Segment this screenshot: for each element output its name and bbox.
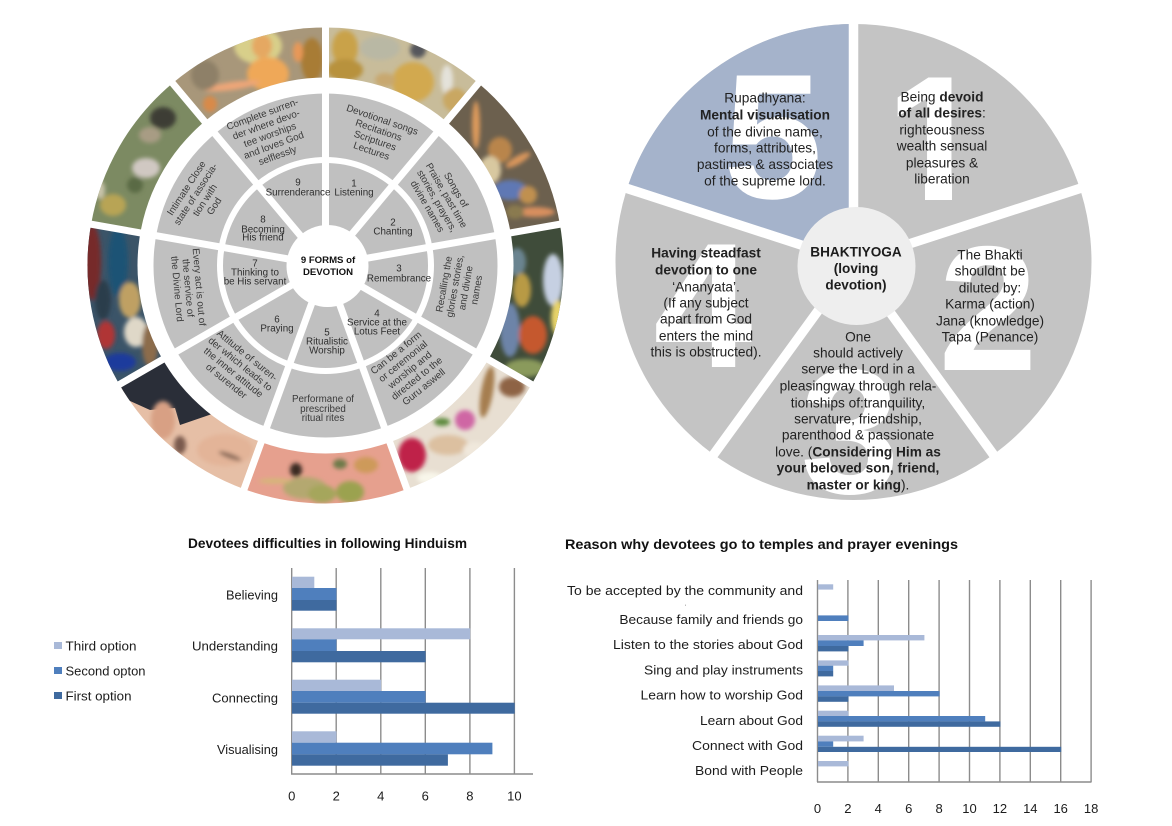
outer ring descriptions: Praise, past time	[423, 161, 469, 231]
inner ring labels: forms 1 to 9: Listening	[334, 188, 374, 198]
image panel 8: procession in green landscape	[92, 86, 202, 230]
centre label	[301, 255, 356, 278]
sector 3 text: love. (Considering Him as	[775, 444, 941, 460]
outer ring descriptions: Performane of	[292, 394, 354, 405]
sector 5 text: forms, attributes,	[714, 140, 816, 156]
bar chart: reasons for attending: 16	[1053, 801, 1068, 816]
sector 4 text: ‘Ananyata’.	[672, 280, 740, 294]
bar chart: reasons for attending: Bond with People	[695, 763, 803, 778]
chart title: reasons: Reason why devotees go to temples and prayer evenings	[565, 537, 958, 552]
chart title: difficulties: Devotees difficulties in following Hinduism	[188, 536, 467, 551]
image panel 4: flowers and offering hand	[393, 362, 530, 488]
bar chart: devotees difficulties: 2	[333, 789, 340, 804]
outer ring descriptions: der which leads to	[206, 335, 274, 394]
outer ring descriptions: the inner attitude	[201, 346, 265, 401]
outer ring descriptions: names	[469, 275, 485, 305]
bar chart: devotees difficulties: Visualising	[217, 742, 278, 757]
outer ring descriptions: the service of	[179, 259, 196, 318]
outer ring descriptions: and loves God	[242, 130, 306, 162]
outer ring descriptions: stories, prayers,	[414, 168, 459, 234]
large sector numerals: 2	[938, 209, 1038, 408]
image panel 1: two golden figures	[329, 28, 476, 120]
outer ring descriptions: worship and	[386, 349, 434, 392]
bar chart: reasons for attending: 10	[962, 801, 977, 816]
bar chart: reasons for attending: 2	[844, 801, 852, 816]
sector 2 text: Jana (knowledge)	[936, 314, 1044, 328]
sector 5 text: of the supreme lord.	[704, 174, 826, 188]
centre circle: Bhaktiyoga: BHAKTIYOGA	[810, 244, 902, 260]
bar chart: reasons for attending: Because family and friends go	[619, 612, 803, 627]
sector 4 text: this is obstructed).	[650, 344, 762, 360]
bar chart: reasons for attending: 12	[993, 801, 1007, 816]
sector 3 text: master or king).	[807, 478, 909, 492]
bar chart: devotees difficulties: Understanding	[192, 638, 278, 654]
bar chart: devotees difficulties: 6	[422, 789, 429, 804]
sector 5 text: Rupadhyana:	[724, 90, 806, 106]
large sector numerals: 1	[886, 39, 984, 238]
image panel 3: Krishna with gopis	[490, 228, 564, 382]
image panel 6: praying hands and face	[121, 362, 258, 488]
bar chart: devotees difficulties: 4	[377, 789, 384, 804]
sector 2 text: shouldnt be	[955, 264, 1025, 278]
large sector numerals: 5	[724, 37, 822, 236]
inner ring labels: forms 1 to 9: Chanting	[373, 226, 413, 238]
outer ring descriptions: prescribed	[300, 404, 346, 415]
sector 1 text: wealth sensual	[896, 138, 987, 154]
bar chart: devotees difficulties: 0	[288, 789, 295, 804]
outer ring descriptions: divine names	[408, 179, 446, 235]
sector 3 text: your beloved son, friend,	[777, 460, 939, 476]
inner ring labels: forms 1 to 9: Praying	[260, 324, 294, 334]
bar chart: reasons for attending: Learn how to worship God	[640, 688, 803, 702]
right wheel: Bhaktiyoga	[616, 17, 1092, 531]
outer ring descriptions: Scriptures	[352, 129, 398, 154]
bar chart: devotees difficulties: Connecting	[212, 690, 278, 706]
sector 3 text: parenthood & passionate	[782, 428, 934, 442]
outer ring descriptions: der where devo-	[231, 108, 302, 142]
inner ring labels: forms 1 to 9: His friend	[242, 232, 284, 244]
inner ring labels: forms 1 to 9: 5	[324, 328, 330, 338]
bar chart: devotees difficulties	[192, 568, 533, 804]
outer ring descriptions: directed to the	[390, 355, 445, 403]
outer ring descriptions: state of associa-	[172, 162, 220, 227]
outer ring descriptions: and divine	[457, 265, 476, 311]
bar chart: reasons for attending: Connect with God	[692, 738, 803, 753]
sector 1 text: Being devoid	[901, 90, 983, 104]
centre circle: Bhaktiyoga	[798, 207, 916, 325]
outer ring descriptions	[163, 97, 488, 424]
inner ring labels: forms 1 to 9: 4	[374, 308, 380, 320]
bar chart: reasons for attending: 4	[875, 801, 882, 816]
sector 2 text: Karma (action)	[945, 296, 1035, 312]
inner ring labels: forms 1 to 9: be His servant	[224, 276, 287, 288]
sector 5 text: of the divine name,	[707, 124, 823, 140]
outer ring descriptions: glories stories,	[445, 254, 466, 318]
centre circle: Bhaktiyoga: devotion)	[825, 278, 887, 292]
bar chart: devotees difficulties: 8	[466, 789, 474, 804]
centre label: DEVOTION	[303, 267, 353, 278]
sector 4 text: apart from God	[660, 312, 752, 326]
outer ring descriptions: Complete surren-	[225, 97, 300, 133]
sector 1 text: of all desires:	[898, 106, 986, 120]
outer ring descriptions: of surender	[203, 362, 249, 402]
legend: Third option	[66, 639, 136, 654]
sector 3 text	[775, 330, 941, 492]
inner ring labels: forms 1 to 9: Ritualistic	[306, 336, 348, 348]
inner ring labels: forms 1 to 9: 8	[260, 214, 266, 226]
bar chart: reasons for attending: 14	[1023, 801, 1038, 816]
sector 1 text: righteousness	[899, 122, 985, 138]
inner ring labels: forms 1 to 9: Worship	[309, 346, 345, 356]
large sector numerals: 3	[800, 332, 900, 531]
sector 4 text: (If any subject	[663, 296, 749, 310]
outer ring descriptions: the Divine Lord	[168, 256, 185, 322]
bar chart: reasons for attending: Listen to the stories about God	[613, 637, 803, 652]
sector 3 text: pleasingway through rela-	[780, 378, 936, 394]
bar chart: reasons for attending: 8	[935, 801, 943, 816]
bar chart: reasons for attending: .	[685, 602, 687, 608]
outer ring descriptions: Lectures	[352, 140, 391, 163]
outer ring descriptions: Every act is out of	[190, 248, 207, 327]
legend: Second opton	[66, 664, 146, 678]
sector 1 text: liberation	[914, 172, 970, 186]
image panel 9: monk in devotion	[175, 28, 322, 120]
image panel 5: Radha Krishna on peach background	[247, 443, 404, 504]
inner ring labels: forms 1 to 9: 9	[295, 178, 301, 188]
centre circle: Bhaktiyoga: (loving	[834, 261, 878, 276]
outer ring descriptions: Songs of	[441, 171, 470, 210]
sector 5 text: Mental visualisation	[700, 108, 830, 122]
image panel 7: couple with curtains	[87, 228, 161, 382]
inner ring labels: forms 1 to 9: 7	[252, 258, 258, 270]
sector 4 text: enters the mind	[659, 328, 753, 344]
sector 3 text: servature, friendship,	[794, 412, 922, 426]
sector 3 text: should actively	[813, 346, 903, 360]
outer ring descriptions: Recitations	[354, 118, 403, 144]
sector 2 text: Tapa (Penance)	[942, 330, 1038, 344]
bar chart: reasons for attending	[567, 580, 1098, 816]
inner ring labels: forms 1 to 9: Remembrance	[367, 274, 432, 284]
bar chart: reasons for attending: To be accepted by the community and	[567, 583, 803, 598]
sector 1 text	[896, 90, 987, 186]
outer ring descriptions: Attitude of suren-	[214, 328, 279, 384]
sector 1 text: pleasures &	[906, 156, 978, 170]
bar chart: devotees difficulties: 10	[507, 789, 522, 804]
sector 3 text: tionships of:tranquility,	[791, 396, 925, 410]
outer ring descriptions: Can be a form	[369, 329, 424, 377]
outer ring descriptions: Guru aswell	[401, 367, 448, 408]
inner ring labels: forms 1 to 9: Thinking to	[231, 268, 280, 278]
bar chart: reasons for attending: 6	[905, 801, 912, 816]
grey ring discs	[138, 78, 514, 454]
inner ring labels: forms 1 to 9: 2	[390, 218, 396, 228]
bar chart: reasons for attending: Sing and play instruments	[644, 662, 804, 678]
outer ring descriptions: selflessly	[257, 144, 298, 168]
outer ring descriptions: God	[205, 196, 224, 217]
inner ring labels: forms 1 to 9: Becoming	[241, 224, 285, 236]
outer ring descriptions: or ceremonial	[377, 339, 430, 385]
sector 5 text: pastimes & associates	[697, 157, 833, 172]
legend	[54, 639, 146, 704]
outer ring descriptions: Intimate Close	[165, 159, 209, 218]
left wheel: 9 forms of devotion	[83, 20, 570, 510]
inner ring labels: forms 1 to 9: 6	[274, 314, 280, 326]
outer ring descriptions: Recalling the	[434, 255, 455, 313]
sector 4 text	[650, 246, 762, 360]
inner ring labels: forms 1 to 9: Lotus Feet	[354, 326, 400, 338]
inner ring labels: forms 1 to 9: 1	[351, 178, 357, 190]
sector 2 text: diluted by:	[959, 280, 1021, 296]
inner ring labels: forms 1 to 9: 3	[396, 264, 402, 274]
image ring: nine illustrated panels	[83, 20, 570, 510]
bar chart: reasons for attending: 18	[1084, 801, 1098, 816]
outer ring descriptions: ritual rites	[302, 413, 344, 424]
bar chart: devotees difficulties: Believing	[226, 588, 278, 602]
large sector numerals	[656, 76, 1030, 495]
sector 2 text	[936, 248, 1044, 344]
sector 4 text: devotion to one	[655, 262, 757, 278]
wheel disc with highlighted sector	[616, 24, 1092, 500]
sector 5 text	[697, 90, 833, 188]
sector 4 text: Having steadfast	[651, 246, 761, 260]
inner ring labels: forms 1 to 9	[224, 178, 432, 356]
bar chart: reasons for attending: Learn about God	[700, 713, 803, 728]
outer ring descriptions: tion with	[191, 182, 220, 219]
centre label: 9 FORMS of	[301, 255, 356, 266]
outer ring descriptions: tee worships	[242, 121, 298, 150]
inner ring labels: forms 1 to 9: Surrenderance	[266, 188, 331, 198]
sector 2 text: The Bhakti	[957, 248, 1023, 262]
inner ring labels: forms 1 to 9: Service at the	[347, 318, 407, 328]
outer ring descriptions: Devotional songs	[345, 103, 419, 138]
sector 3 text: One	[845, 330, 871, 344]
sector 3 text: serve the Lord in a	[801, 362, 915, 376]
bar chart: reasons for attending: 0	[814, 801, 821, 816]
large sector numerals: 4	[654, 206, 752, 405]
image panel 2: dancing figures	[449, 86, 560, 230]
legend: First option	[66, 688, 132, 704]
